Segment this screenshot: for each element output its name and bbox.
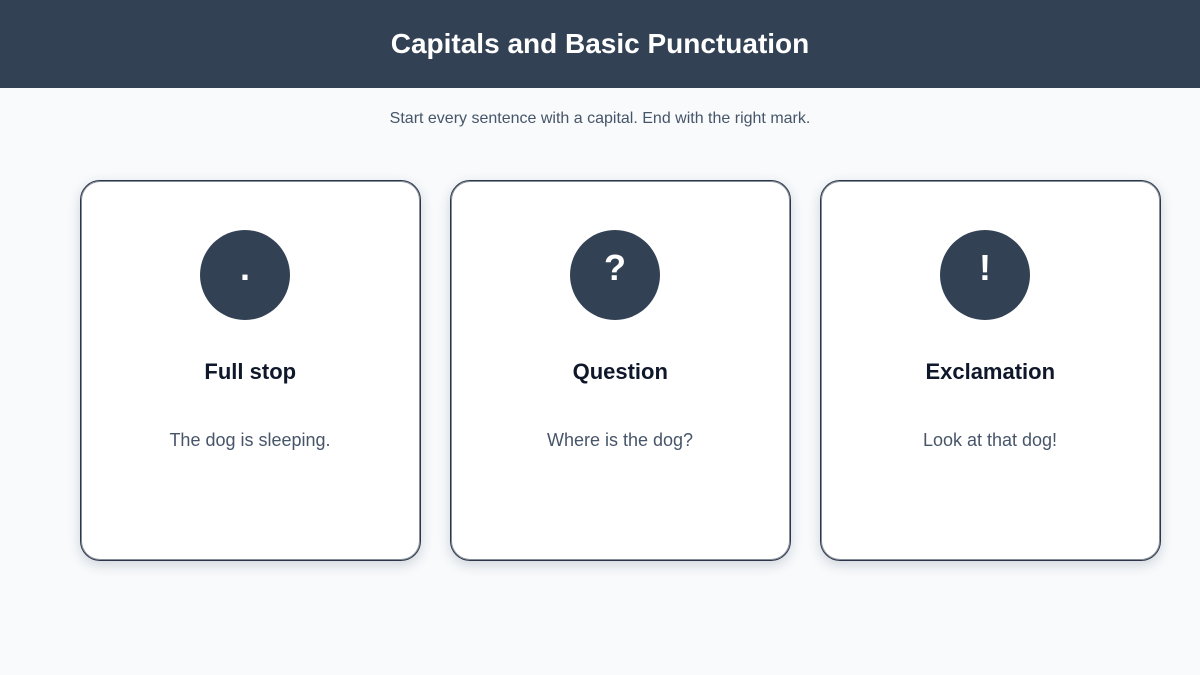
heading: exclamation: Exclamation	[925, 359, 1055, 384]
example: question: Where is the dog?	[547, 430, 693, 450]
panel: question	[450, 180, 791, 561]
example: full stop: The dog is sleeping.	[169, 430, 331, 450]
example: exclamation: Look at that dog!	[923, 430, 1057, 450]
heading: full stop: Full stop	[204, 359, 296, 384]
heading: question: Question	[573, 359, 668, 384]
icon: exclamation mark: !	[979, 247, 991, 288]
icon: full stop	[200, 230, 290, 320]
panel: full stop	[80, 180, 421, 561]
panel: exclamation	[820, 180, 1161, 561]
icon: full stop: .	[240, 247, 250, 288]
icon: question mark: ?	[604, 247, 626, 288]
icon: question mark	[570, 230, 660, 320]
icon: exclamation mark	[940, 230, 1030, 320]
subtitle: Start every sentence with a capital. End with the right mark.	[390, 110, 810, 127]
title	[0, 0, 1200, 88]
title: Capitals and Basic Punctuation	[391, 28, 809, 59]
